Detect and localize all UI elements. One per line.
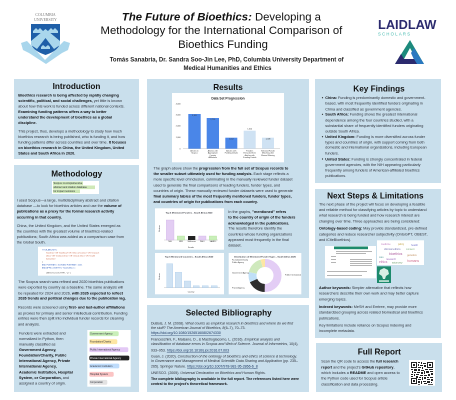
findings list: government agencies, with the NIH appearing particularly: [325, 163, 421, 167]
logo: Laidlaw Scholars: LAIDLAW: [378, 17, 437, 32]
bar chart: data set progression: Extracted from: [244, 152, 256, 155]
bar chart: data set progression: Articles with: [245, 154, 255, 157]
methodology text: search: China, the United Kingdom, and the United States emerged as: [17, 224, 121, 228]
references: Franceschini, F., Maisano, D., & Mastrogiacomo, L. (2016). Empirical analysis and: [151, 337, 281, 341]
bar chart: data set progression: 1,614: [247, 128, 252, 130]
donut chart: funder types: Foundation/Charity: [232, 258, 248, 262]
authors: Medical Humanities and Ethics: [183, 66, 272, 72]
donut chart: funder types: Distribution of Mentioned Funder Types - South Africa 2020: [234, 256, 297, 258]
panel: next steps and limitations: [315, 189, 441, 338]
bar chart: data set progression: Selected Funder: [261, 150, 275, 152]
logo: Laidlaw Scholars: [378, 17, 437, 64]
methodology text: funder classes: Foundation/Charity, Public: [19, 354, 66, 358]
code snippet: Scopus query: ethics" OR "medical ethics" OR "clinical ethics" OR "health: [46, 254, 95, 258]
donut chart: funder types: Government Agency: [232, 272, 249, 274]
Scopus callout: for impact revisions: [54, 190, 76, 193]
methodology text: funder classes: [19, 331, 73, 386]
intro text: Bioethics research is being affected by rapidly changing: [18, 94, 120, 98]
word cloud: care: [379, 256, 384, 259]
bar chart: top 5 mentioned countries: Country: [188, 290, 194, 294]
bar chart: top 5 mentioned funders: Top 5 Mentioned Funders - South Africa 2020: [166, 211, 213, 214]
title: Bioethics Funding: [178, 39, 268, 51]
next steps intro text: [319, 203, 428, 242]
bar chart: data set progression: 1,012: [229, 138, 234, 140]
heading: introduction: Introduction: [53, 82, 100, 91]
legend: funder types: Hospital System: [90, 373, 108, 376]
next steps text: keywords and limitations: emerging topics.: [319, 297, 347, 301]
bar chart: data set progression: 3,105: [192, 115, 197, 117]
results text: mentioned: The results therefore identify the: [228, 227, 282, 231]
bar chart: top 5 mentioned countries: Mentions: [158, 273, 161, 280]
next steps text: keywords and limitations: researchers describe their own work and may better capture: [319, 292, 419, 296]
findings list: China and classified as government agencies.: [325, 107, 402, 111]
word cloud: research: [386, 257, 397, 261]
code snippet: Scopus query: AND AFFILCOUNTRY ( "South Africa" ): [42, 266, 76, 270]
bar chart: data set progression: Country: [209, 154, 216, 157]
methodology text: funder classes: System, or Corporation, and: [19, 376, 69, 380]
panel: selected bibliography: [147, 305, 309, 392]
methodology text: screening: as proxies for primary and senior intellectual contribution. Funding: [18, 311, 127, 315]
bar chart: top 5 mentioned funders: Mentions: [158, 225, 161, 232]
title: Methodology for the International Comparison of: [101, 25, 343, 37]
full report text: report and the project's GitHub repository,: [321, 365, 395, 369]
results text: mentioned: In the graphs, "mentioned" refers: [228, 210, 286, 214]
Scopus callout: abstract and citation database: [54, 186, 87, 189]
intro text: understand the development of bioethics as a global: [18, 116, 112, 120]
donut chart: funder types: Public International: [285, 274, 302, 276]
results text: more specific level of inclusion, culminating in the manually reviewed funder dataset: [154, 178, 293, 182]
logo: Laidlaw Scholars: SCHOLARS: [378, 32, 410, 36]
bar chart: top 5 mentioned funders: NRF: [179, 241, 184, 243]
intro text: States and South Africa in 2020.: [18, 151, 75, 155]
methodology text: funder classes: International Agency, Private: [19, 359, 70, 363]
heading: selected bibliography: Selected Bibliography: [186, 309, 272, 318]
bar chart: data set progression: Articles with: [208, 150, 218, 152]
full report text: the Python code used for Scopus article: [321, 377, 388, 381]
donut chart: funder types: [229, 253, 302, 294]
code snippet: Scopus query: AND PUBYEAR > 2019 AND PUBYEAR < 2021: [42, 264, 82, 266]
next steps text: keywords and limitations: Indexed keywords: MeSH and Emtree, may provide more: [319, 305, 417, 309]
legend: funder types: Academic Institution: [90, 365, 113, 368]
next steps intro text: and reliable method for classifying articles by topic to understand: [319, 208, 427, 212]
bar chart: top 5 mentioned funders: Funder: [188, 246, 194, 249]
code snippet: Scopus query: TITLE-ABS-KEY (: [42, 248, 57, 252]
logo: green tree: [377, 266, 391, 283]
methodology text: funder classes: Government Agency,: [19, 348, 56, 352]
references: In Governance and Management of Medical Scientific Data Sharing and Application (pp. 235–: [151, 359, 298, 363]
code snippet: Scopus query: LIMIT-TO ( DOCTYPE , "ar" ): [46, 272, 71, 274]
intro text: [18, 94, 126, 155]
next steps intro text: The next phase of the project will focus on developing a feasible: [319, 203, 425, 207]
code snippet: Scopus query: "bioethics" OR "bioethical" OR "ethics of science" OR "research: [46, 252, 99, 254]
methodology text: screening: be repeated for 2024 and 2026, with 2026 expected to reflect: [18, 291, 124, 295]
heading: methodology: Methodology: [51, 170, 103, 179]
results text: mentioned: [228, 210, 295, 248]
word cloud: policy: [398, 243, 405, 246]
word cloud: [377, 240, 424, 265]
word cloud: genetics: [407, 253, 417, 257]
results text: [154, 166, 293, 204]
methodology text: screening: entries were then split into individual funder records for cleaning: [18, 317, 124, 321]
methodology text: search: the Global South.: [17, 240, 46, 244]
next steps intro text: Ontology-based coding: May provide standardized, pre-defined: [319, 227, 427, 231]
heading: results: Results: [213, 83, 243, 92]
intro text: about how this work is funded across different national contexts.: [18, 104, 125, 108]
full report text: [321, 360, 400, 386]
bar chart: data set progression: Articles with: [226, 150, 236, 152]
legend: funder types: Corporation: [90, 381, 104, 384]
methodology text: search: publications; South Africa was added as a comparison case from: [17, 235, 124, 239]
next steps text: keywords and limitations: incomplete metadata.: [319, 329, 355, 333]
references: central to the project's theoretical framework.: [151, 382, 228, 386]
methodology text: screening: 2026 trends and political changes due to the publication lag.: [18, 297, 126, 301]
heading: next steps: Next Steps & Limitations: [327, 191, 424, 200]
results text: the smaller subset ultimately used for funding analysis. Each stage reflects a: [154, 172, 289, 176]
donut chart: funder types: Public Agency: [232, 261, 244, 264]
bar chart: data set progression: 2,710: [210, 119, 215, 121]
word cloud: clinical ethics: [384, 247, 401, 251]
donut chart: funder types: Private Agency: [232, 286, 245, 290]
bar chart: data set progression: Funding Details: [225, 152, 238, 155]
findings list: funders.: [325, 151, 339, 155]
findings list: United Kingdom: Funding is more diversified across funder: [325, 135, 426, 139]
methodology text: search: database —to look for bioethics articles and use the volume of: [17, 204, 122, 208]
references: UNESCO. (2005). Universal Declaration on Bioethics and Human Rights.: [151, 371, 266, 375]
title: The Future of Bioethics: Developing a: [122, 12, 321, 24]
methodology text: screening: were exported by country as a baseline. The same analysis will: [18, 286, 123, 290]
bar chart: data set progression: Funders: [246, 150, 253, 152]
logo: Columbia University crest: COLUMBIA: [35, 13, 56, 17]
bar chart: data set progression: 2,000: [176, 126, 180, 128]
results text: countries of origin. These manually reviewed funder datasets were used to generate: [154, 189, 293, 193]
word cloud: ethics: [379, 260, 388, 264]
logo: Columbia University crest: [21, 13, 70, 64]
bar chart: top 5 mentioned funders: Wellcome: [188, 241, 196, 243]
results text: mentioned: appeared most frequently in the final: [228, 238, 289, 242]
code snippet: Scopus query: humanities": [46, 258, 56, 260]
bar chart: data set progression: 1,000: [176, 137, 180, 139]
findings list: based, with most frequently identified funders originating in: [325, 102, 423, 106]
findings list: types and countries of origin, with support coming from both: [325, 140, 425, 144]
heading: full report: Full Report: [358, 347, 401, 356]
panel: methodology: [14, 165, 139, 392]
panel: results: [147, 79, 309, 298]
intro text: scientific, political, and social challenges, yet little is known: [18, 99, 122, 103]
legend: funder types: Private International Agency: [90, 357, 122, 360]
methodology text: search: occurring in that country.: [17, 215, 62, 219]
next steps text: keywords and limitations: Key limitations include reliance on Scopus indexing and: [319, 323, 411, 327]
code snippet: Scopus query: [38, 247, 113, 276]
legend: funder types: Foundation/Charity: [90, 340, 112, 344]
word cloud: health: [411, 243, 419, 247]
bar chart: data set progression: Articles in: [190, 150, 199, 152]
results text: mentioned: countries whose funding organizations: [228, 232, 292, 236]
results text: final summary tables of the most frequently mentioned funders, funder types,: [154, 194, 292, 198]
findings list: [322, 96, 427, 178]
next steps text: keywords and limitations: [319, 286, 423, 333]
findings list: dependence among the four countries studied, with a: [325, 118, 414, 122]
Scopus callout: Scopus: A comprehensive: [54, 182, 83, 185]
bar chart: data set progression: 4,000: [176, 103, 180, 105]
next steps intro text: changing over time. Three approaches are being considered:: [319, 219, 420, 223]
bar chart: top 5 mentioned funders: [155, 208, 224, 250]
next steps intro text: categories and reduce researcher subjectivity (OntoGPT, OBEST,: [319, 232, 428, 236]
next steps intro text: and iCiteBioethics).: [319, 238, 351, 242]
methodology text: search: the countries with the greatest volume of bioethics-related: [17, 230, 113, 234]
QR code: [409, 360, 435, 386]
full report text: which includes a README and open access to: [321, 371, 400, 375]
logo: Columbia University crest: UNIVERSITY: [34, 18, 57, 22]
bar chart: data set progression: [172, 93, 284, 162]
word cloud: bioethics: [389, 252, 403, 256]
bar chart: data set progression: 0: [179, 148, 180, 150]
bar chart: data set progression: Affiliations: [209, 156, 217, 159]
bar chart: top 5 mentioned funders: WHO: [200, 241, 205, 243]
references: 933–953. https://doi.org/10.1016/j.joi.2016.07.003: [151, 348, 229, 352]
bar chart: top 5 mentioned funders: NIH: [168, 241, 172, 243]
code snippet: Scopus query: ): [42, 262, 43, 264]
intro text: on bioethics research in China, the United Kingdom, United: [18, 146, 125, 150]
full report text: classification and data processing.: [321, 382, 378, 386]
methodology text: screening: Records were screened using first- and last-author affiliations: [18, 306, 125, 310]
references: DuBois, J. M. (2008). What counts as empirical research in bioethics and where do we find: [151, 321, 294, 325]
references: The complete bibliography is available in the full report. The references listed here were: [151, 377, 299, 381]
methodology text: funder classes: manually classified as: [19, 343, 56, 347]
findings list: United States: Funding is strongly concentrated in federal: [325, 157, 422, 161]
results text: mentioned: acknowledged in the publications.: [228, 221, 289, 225]
methodology text: funder classes: Funders were extracted and: [19, 331, 66, 335]
bar chart: top 5 mentioned countries: Top 5 Mentioned Countries - South Africa 2020: [165, 256, 214, 258]
bar chart: top 5 mentioned countries: [155, 253, 224, 294]
Scopus callout: [52, 181, 99, 194]
findings list: China: Funding is predominantly domestic and government-: [325, 96, 426, 100]
legend: funder types: Government Agency: [90, 332, 113, 336]
intro text: Examining funding patterns offers a way to better: [18, 110, 107, 114]
legend: funder types: [87, 330, 131, 387]
heading: key findings: Key Findings: [353, 85, 405, 94]
methodology text: funder classes: normalized in Python, then: [19, 337, 63, 341]
intro text: bioethics research is being published, who is funding it, and how: [18, 135, 125, 139]
next steps text: keywords and limitations: publications.: [319, 316, 340, 320]
word cloud: autonomy: [392, 262, 403, 264]
findings list: domestic and international organizations, including European: [325, 146, 427, 150]
next steps text: keywords and limitations: Author keywords: Simpler alternative that reflects how: [319, 286, 412, 290]
results text: The graph above show the progression from the full set of Scopus records to: [154, 166, 289, 170]
results text: mentioned: to the country of origin of the funders: [228, 216, 295, 220]
panel: introduction: [14, 79, 139, 159]
references: [151, 321, 299, 386]
results text: and countries of origin for publications from each country.: [154, 200, 258, 204]
methodology text: funder classes: assigned a country of origin.: [19, 382, 66, 386]
findings list: substantial share of frequently identified funders originating: [325, 124, 423, 128]
methodology text: search: publications as a proxy for the formal research activity: [17, 210, 115, 214]
methodology text: funder classes: International Agency,: [19, 365, 57, 369]
references: https://doi.org/10.1080/15265160802674330: [151, 331, 221, 335]
methodology text: funder classes: Academic Institution, Hospital: [19, 370, 73, 374]
references: Guan, J. (2020). Construction of the ontology of bioethics and ethics of science & technology.: [151, 354, 297, 358]
findings list: South Africa: Funding shows the greatest international: [325, 113, 417, 117]
methodology text: screening: The Scopus search was refined and 2020 bioethics publications: [18, 280, 124, 284]
results text: used to generate the final comparisons of leading funders, funder types, and: [154, 183, 280, 187]
bar chart: data set progression: Manual Filtering: [261, 154, 275, 157]
word cloud: medicine: [381, 243, 391, 246]
bar chart: top 5 mentioned funders: SAMRC: [210, 240, 217, 243]
bar chart: data set progression: Matching after: [262, 152, 274, 155]
bar chart: data set progression: 3,000: [176, 115, 180, 117]
methodology text: search: I used Scopus—a large, multidisciplinary abstract and citation: [17, 199, 119, 203]
next steps text: keywords and limitations: standardized grouping across related biomedical and bioethics: [319, 311, 423, 315]
references: the stuff? The American Journal of Bioethics, 8(6–7), 70–73.: [151, 326, 246, 330]
legend: funder types: Public International Agency: [90, 348, 121, 352]
intro text: discipline.: [18, 121, 37, 125]
methodology text: screening: and analysis.: [18, 322, 40, 326]
word cloud: humans: [407, 259, 419, 263]
references: classification of database errors in Scopus and Web of Science. Journal of Informetrics, 10(4),: [151, 342, 298, 346]
authors: Tomás Sanabria, Dr. Sandra Soo-Jin Lee, PhD, Columbia University Department of: [110, 58, 345, 64]
word cloud: consent: [406, 248, 415, 251]
methodology text: search: [17, 199, 124, 244]
bar chart: data set progression: Data Set Progression: [211, 96, 245, 100]
bar chart: data set progression: Appropriate: [208, 152, 218, 155]
panel: full report: [316, 343, 442, 392]
findings list: frequently among funders of American-affiliated bioethics: [325, 168, 420, 172]
header: [21, 12, 437, 72]
bar chart: data set progression: 1,008: [266, 138, 270, 140]
full report text: Scan the QR code to access the full research: [321, 360, 399, 364]
intro text: funding patterns differ across countries and over time. It focuses: [18, 140, 126, 144]
bar chart: data set progression: Scopus: [191, 153, 198, 155]
screenshot: ontology tool: [325, 246, 376, 278]
bar chart: data set progression: Funding Details: [243, 156, 256, 159]
panel: key findings: [315, 79, 441, 183]
findings list: publications.: [325, 174, 346, 178]
next steps intro text: what research is being funded and how research interest are: [319, 214, 420, 218]
methodology text: screening: [18, 280, 127, 326]
results text: mentioned: dataset.: [228, 244, 242, 248]
intro text: This project, thus, develops a methodology to study how much: [18, 130, 122, 134]
findings list: outside South Africa.: [325, 129, 360, 133]
references: 265). Springer Nature. https://doi.org/10.1007/978-981-95-2866-6_8: [151, 364, 258, 368]
